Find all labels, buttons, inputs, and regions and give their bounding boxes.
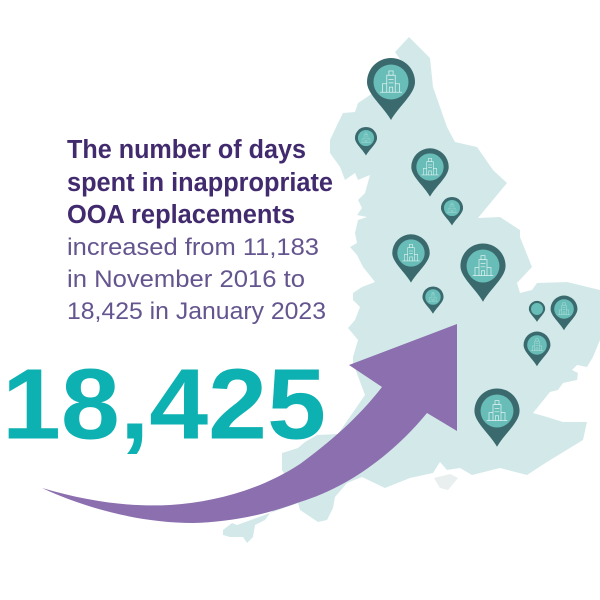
pin 9: [551, 296, 577, 330]
heading and description: [67, 136, 333, 325]
big number: 18,425: [2, 348, 326, 460]
pin 6: [460, 243, 506, 302]
heading and description: in November 2016 to: [67, 266, 305, 293]
map of England: [223, 37, 600, 543]
heading and description: spent in inappropriate: [67, 169, 333, 197]
pin 7: [422, 286, 444, 314]
heading and description: The number of days: [67, 136, 306, 164]
pin 3: [411, 148, 449, 197]
pin 4: [441, 197, 463, 225]
pin 8: [529, 301, 545, 322]
Isle of Wight: [434, 474, 458, 490]
heading and description: 18,425 in January 2023: [67, 298, 326, 325]
pin 5: [392, 234, 430, 283]
pin 10: [524, 332, 550, 366]
arrow: [42, 324, 457, 523]
pin 2: [355, 127, 377, 155]
map pins: [355, 58, 577, 447]
heading and description: OOA replacements: [67, 201, 295, 229]
pin 11: [474, 388, 520, 447]
pin 1: [367, 58, 415, 120]
heading and description: increased from 11,183: [67, 234, 319, 261]
